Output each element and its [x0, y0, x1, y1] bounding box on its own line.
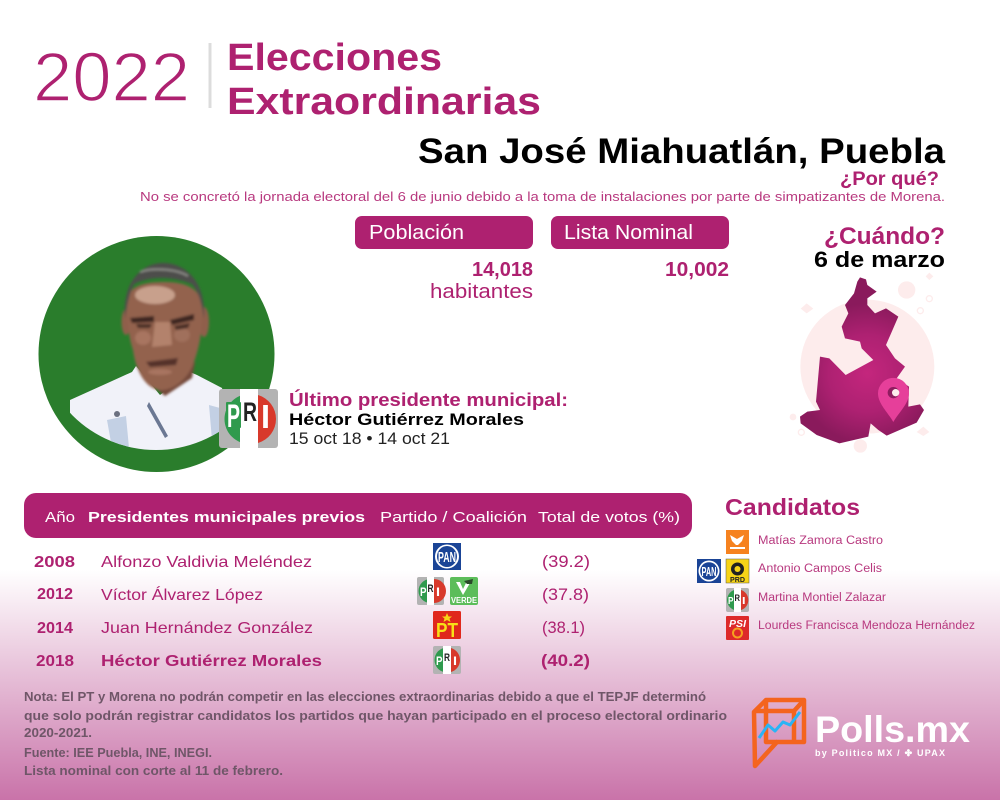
- row 2018: [36, 646, 590, 674]
- candidate: Lourdes Francisca Mendoza Hernández: [726, 616, 975, 640]
- candidate: Martina Montiel Zalazar: Martina Montiel Zalazar: [758, 592, 886, 604]
- table header: Total de votos (%): [538, 509, 680, 526]
- row 2008: (39.2): [542, 552, 590, 571]
- heading: elecciones extraordinarias: Elecciones: [227, 37, 442, 79]
- row 2018: (40.2): [541, 651, 590, 670]
- when: 6 de marzo: [814, 247, 945, 272]
- icon: orange chat cube: [754, 700, 804, 766]
- last municipal president: [289, 389, 568, 448]
- row 2018: Héctor Gutiérrez Morales: [101, 653, 322, 670]
- table header: Partido / Coalición: [380, 509, 527, 526]
- stat: poblacion: [355, 216, 533, 303]
- hair: [125, 263, 204, 318]
- forehead highlight: [135, 286, 175, 304]
- party badge: PRI: I: [261, 398, 270, 435]
- row 2008: Alfonzo Valdivia Meléndez: [101, 554, 312, 571]
- row 2012: [37, 577, 589, 605]
- row 2014: [37, 611, 585, 642]
- shirt: [70, 366, 222, 450]
- when: ¿Cuándo?: [824, 223, 945, 250]
- candidate: Lourdes Francisca Mendoza Hernández: PSI: [729, 619, 746, 630]
- candidate: Matías Zamora Castro: Matías Zamora Castro: [758, 535, 883, 547]
- candidate: Antonio Campos Celis: [697, 559, 882, 584]
- why heading: ¿Por qué?: [840, 169, 939, 190]
- last municipal president: Héctor Gutiérrez Morales: [289, 410, 524, 429]
- heading: elecciones extraordinarias: Extraordinarias: [227, 81, 541, 123]
- footnote: que solo podrán registrar candidatos los partidos que hayan participado en el proceso electoral ordinario: [24, 708, 727, 723]
- row 2014: (38.1): [542, 618, 585, 637]
- byline: by Politico MX / ✤ UPAX: [815, 748, 945, 758]
- stat: poblacion: Población: [369, 222, 464, 244]
- row 2012: VERDE: [451, 596, 478, 605]
- title: [33, 37, 541, 123]
- head: [127, 282, 202, 390]
- row 2012: I: [436, 585, 440, 599]
- candidate: Antonio Campos Celis: Antonio Campos Celis: [758, 563, 882, 575]
- row 2008: 2008: [34, 554, 75, 571]
- footnote: Lista nominal con corte al 11 de febrero.: [24, 763, 283, 778]
- row 2008: [34, 543, 590, 571]
- row 2012: 2012: [37, 586, 73, 603]
- when: [814, 223, 945, 272]
- stat: lista nominal: [551, 216, 729, 281]
- stat: lista nominal: Lista Nominal: [564, 222, 693, 244]
- footnote: [24, 689, 727, 778]
- stat: lista nominal: 10,002: [665, 259, 729, 281]
- candidate: Martina Montiel Zalazar: R: [734, 593, 740, 604]
- row 2008: PAN: [438, 549, 456, 566]
- row 2018: 2018: [36, 653, 74, 670]
- row 2018: I: [453, 654, 457, 668]
- logo: Polls.mx: [754, 700, 970, 766]
- candidates heading: Candidatos: [725, 494, 860, 520]
- row 2012: R: [428, 583, 434, 595]
- party badge: PRI: P: [227, 398, 240, 434]
- row 2012: (37.8): [542, 585, 589, 604]
- candidate: Lourdes Francisca Mendoza Hernández: Lourdes Francisca Mendoza Hernández: [758, 620, 975, 632]
- footnote: Fuente: IEE Puebla, INE, INEGI.: [24, 745, 212, 760]
- candidate: Martina Montiel Zalazar: P: [728, 596, 734, 607]
- row 2018: R: [444, 652, 450, 664]
- candidate: Martina Montiel Zalazar: I: [742, 596, 746, 607]
- row 2014: PT: [436, 620, 458, 642]
- party badge: PRI: R: [243, 397, 257, 427]
- map of Puebla: [790, 273, 934, 453]
- footnote: 2020-2021.: [24, 725, 92, 740]
- why explanation: No se concretó la jornada electoral del 6 de junio debido a la toma de instalaciones por parte de simpatizantes de Morena.: [140, 189, 945, 204]
- last municipal president: Último presidente municipal:: [289, 389, 568, 410]
- ears: [122, 309, 130, 335]
- table of previous presidents: [24, 493, 692, 674]
- candidate: Antonio Campos Celis: PRD: [730, 577, 745, 584]
- party badge: PRI: [219, 389, 278, 448]
- map pin: [878, 378, 909, 422]
- row 2018: P: [436, 654, 442, 668]
- neck: [158, 362, 196, 398]
- row 2014: 2014: [37, 620, 73, 637]
- last municipal president: 15 oct 18 • 14 oct 21: [289, 429, 450, 448]
- portrait: [38, 236, 274, 472]
- wordmark: Polls.mx: [815, 709, 970, 750]
- row 2012: P: [420, 585, 426, 599]
- candidate: Martina Montiel Zalazar: [726, 588, 886, 612]
- stat: poblacion: habitantes: [430, 281, 533, 303]
- table header: Presidentes municipales previos: [88, 509, 365, 526]
- stat: poblacion: 14,018: [472, 259, 533, 281]
- candidate: Matías Zamora Castro: [726, 530, 883, 554]
- year: 2022: [33, 38, 190, 116]
- footnote: Nota: El PT y Morena no podrán competir en las elecciones extraordinarias debido a que el TEPJF determinó: [24, 689, 706, 704]
- panel: candidates: [697, 494, 975, 640]
- location heading: San José Miahuatlán, Puebla: [418, 132, 946, 171]
- heading: elecciones extraordinarias: [227, 37, 541, 123]
- row 2012: Víctor Álvarez López: [101, 585, 263, 604]
- table header: Año: [45, 509, 75, 526]
- candidate: Antonio Campos Celis: PAN: [702, 564, 716, 579]
- table header: [24, 493, 692, 538]
- row 2014: Juan Hernández González: [101, 620, 313, 637]
